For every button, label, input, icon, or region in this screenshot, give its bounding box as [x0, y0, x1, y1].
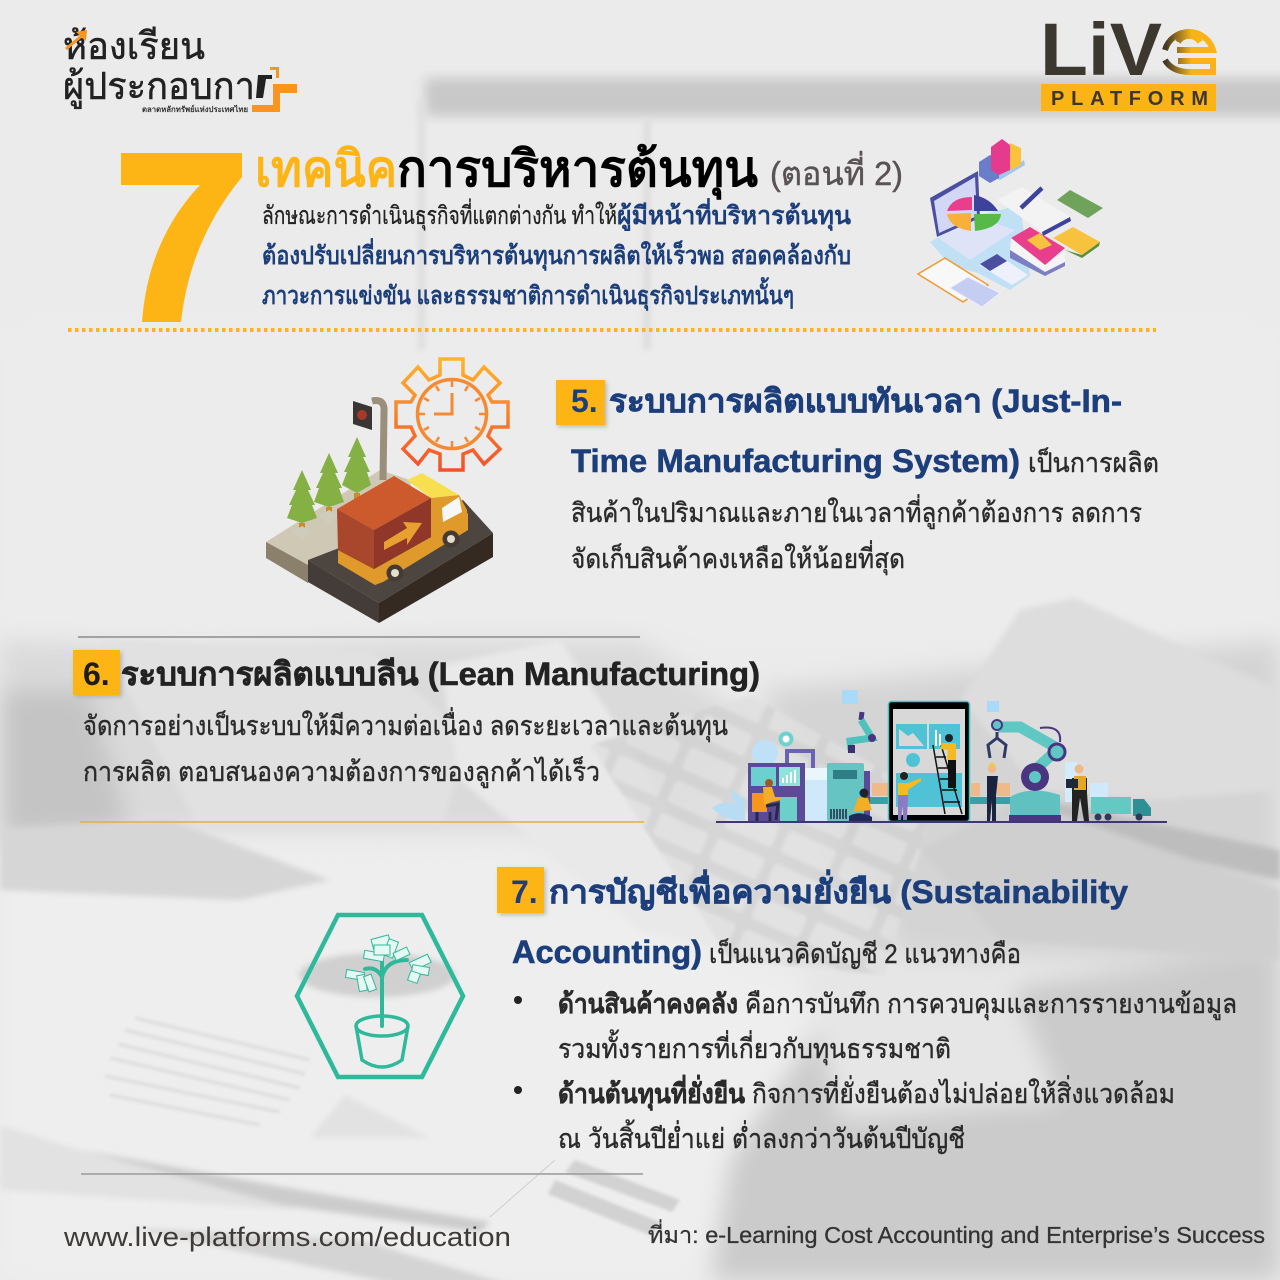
intro paragraph: ต้องปรับเปลี่ยนการบริหารต้นทุนการผลิตให้เร็วพอ สอดคล้องกับ [262, 238, 851, 272]
number badge 6 [73, 650, 122, 697]
section 5: ระบบการผลิตแบบทันเวลา (Just-In- [609, 383, 1122, 419]
bullet list: รวมทั้งรายการที่เกี่ยวกับทุนธรรมชาติ [558, 1029, 951, 1066]
section 7: Accounting) [512, 934, 702, 970]
section 5 [556, 380, 1159, 576]
bullet list: ด้านต้นทุนที่ยั่งยืน [558, 1074, 745, 1111]
title [255, 141, 903, 200]
logo: Hong Rian Phu Prakop Kan: ผู้ประกอบกา [63, 66, 255, 109]
number badge 7: 7. [511, 874, 538, 910]
bullet list: คือการบันทึก การควบคุมและการรายงานข้อมูล [745, 989, 1237, 1021]
section 7: เป็นแนวคิดบัญชี 2 แนวทางคือ [709, 936, 1021, 969]
bullet list: ด้านสินค้าคงคลัง [558, 989, 738, 1019]
bullet list [514, 989, 1237, 1154]
intro paragraph: ผู้มีหน้าที่บริหารต้นทุน [617, 198, 851, 232]
bullet list: กิจการที่ยั่งยืนต้องไม่ปล่อยให้สิ่งแวดล้อม [752, 1075, 1175, 1109]
section 5: Time Manufacturing System) [571, 443, 1020, 479]
section 7: การบัญชีเพื่อความยั่งยืน (Sustainability [549, 869, 1128, 911]
section 6: ระบบการผลิตแบบลีน (Lean Manufacturing) [121, 656, 760, 692]
icon: smart factory illustration [712, 690, 1167, 823]
section 6 [73, 650, 760, 788]
section 6: การผลิต ตอบสนองความต้องการของลูกค้าได้เร็ว [83, 754, 600, 788]
intro paragraph: ภาวะการแข่งขัน และธรรมชาติการดำเนินธุรกิจประเภทนั้นๆ [262, 276, 794, 312]
icon: money plant in hexagon [297, 915, 463, 1077]
icon: accounting isometric illustration [918, 139, 1103, 307]
logo: LiVe Platform [1040, 8, 1216, 111]
bullet list: ณ วันสิ้นปีย่ำแย่ ต่ำลงกว่าวันต้นปีบัญชี [558, 1119, 965, 1154]
source credit: ที่มา: e-Learning Cost Accounting and Enterprise’s Success [648, 1219, 1265, 1248]
number badge 7 [497, 867, 546, 915]
title: เทคนิค [255, 141, 397, 197]
number badge 5 [556, 380, 607, 427]
intro paragraph: ลักษณะการดำเนินธุรกิจที่แตกต่างกัน ทำให้ [262, 198, 617, 231]
section 5: สินค้าในปริมาณและภายในเวลาที่ลูกค้าต้องการ ลดการ [571, 494, 1142, 529]
title: การบริหารต้นทุน [397, 141, 758, 200]
icon: delivery truck and clock gear [266, 359, 508, 623]
logo: Hong Rian Phu Prakop Kan: ตลาดหลักทรัพย์แห่งประเทศไทย [142, 104, 248, 114]
section 5: จัดเก็บสินค้าคงเหลือให้น้อยที่สุด [571, 540, 905, 576]
logo: LiVe Platform: LiV [1040, 8, 1162, 91]
dotted divider [68, 328, 1156, 332]
number badge 6: 6. [83, 656, 110, 692]
title: (ตอนที่ 2) [770, 151, 903, 192]
number badge 5: 5. [571, 383, 598, 419]
logo: Hong Rian Phu Prakop Kan: ห้องเรียน [63, 26, 205, 68]
big numeral 7 [121, 153, 242, 322]
logo: LiVe Platform: PLATFORM [1051, 88, 1208, 110]
logo: Hong Rian Phu Prakop Kan [63, 26, 297, 114]
section 5: เป็นการผลิต [1028, 445, 1159, 478]
section 6: จัดการอย่างเป็นระบบให้มีความต่อเนื่อง ลดระยะเวลาและต้นทุน [83, 707, 728, 743]
footer url: www.live-platforms.com/education [63, 1222, 511, 1252]
section 7 [497, 867, 1237, 1154]
intro paragraph [262, 198, 851, 312]
